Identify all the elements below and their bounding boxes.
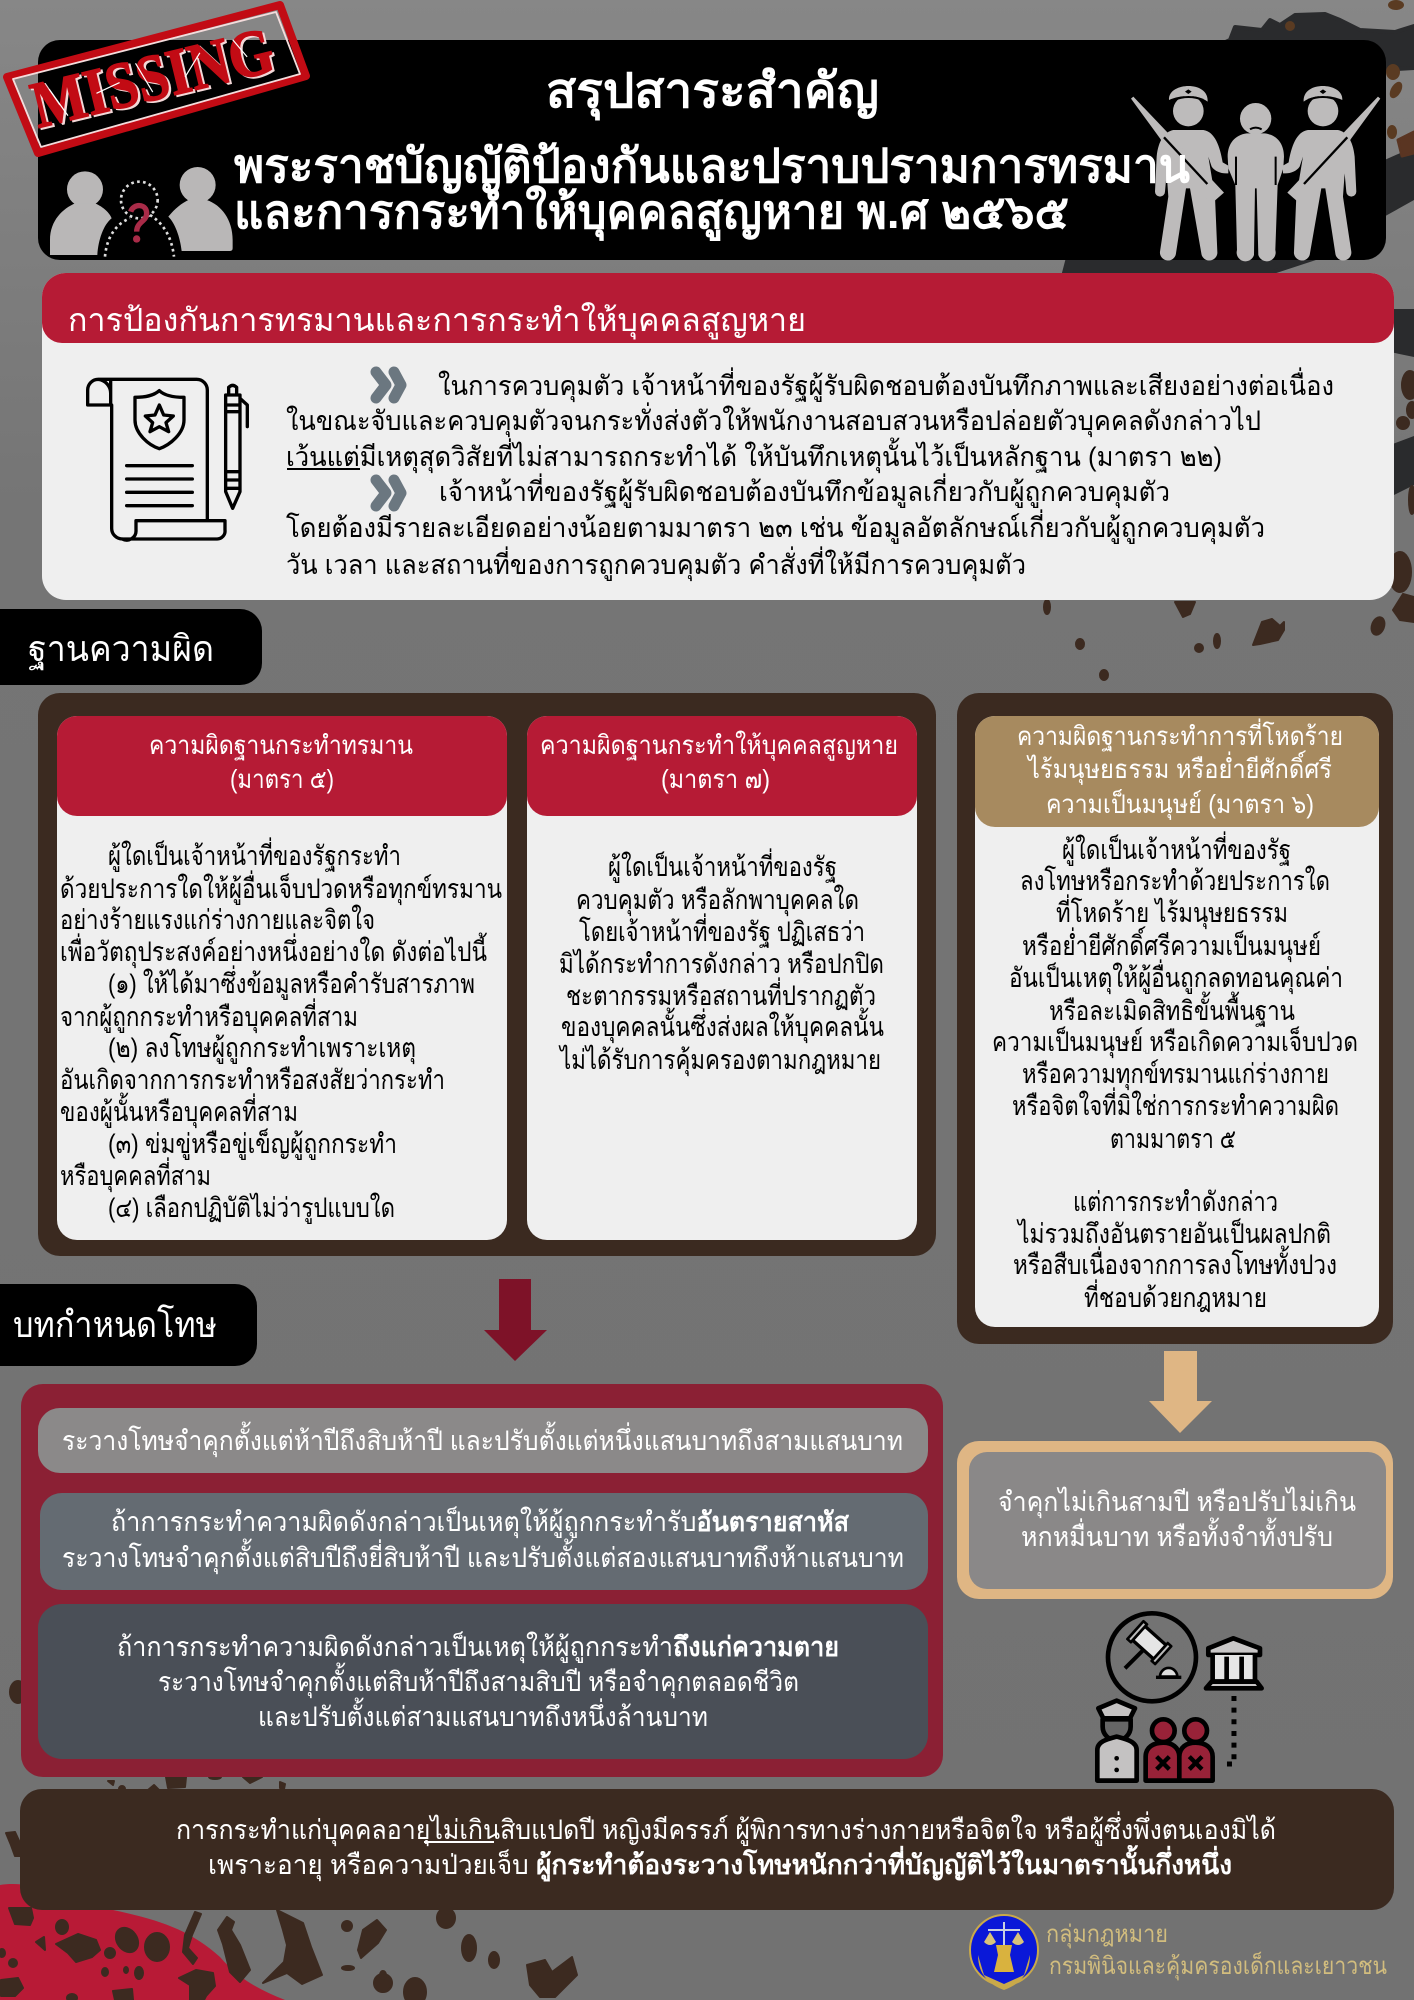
header band — [38, 40, 1386, 261]
card: torture offence: ผู้ใดเป็นเจ้าหน้าที่ของรัฐกระทำ — [108, 837, 401, 872]
card: torture offence: ด้วยประการใดให้ผู้อื่นเจ็บปวดหรือทุกข์ทรมาน — [60, 870, 502, 906]
panel: cruel treatment offence: ตามมาตรา ๕ — [1110, 1124, 1236, 1154]
credit text — [1046, 1921, 1387, 1981]
panel: cruel treatment offence: หรือย่ำยีศักดิ์ศรีความเป็นมนุษย์ — [1022, 926, 1321, 963]
section tab: penalties — [0, 1284, 257, 1366]
panel: penalties — [21, 1384, 943, 1777]
penalty: death: และปรับตั้งแต่สามแสนบาทถึงหนึ่งล้านบาท — [258, 1697, 708, 1732]
card: torture offence: (มาตรา ๕) — [230, 764, 334, 794]
card: torture offence: จากผู้ถูกกระทำหรือบุคคลที่สาม — [60, 998, 358, 1034]
card: enforced disappearance offence: ความผิดฐานกระทำให้บุคคลสูญหาย — [540, 730, 898, 761]
panel: cruel treatment offence: ผู้ใดเป็นเจ้าหน้าที่ของรัฐ — [1062, 831, 1291, 866]
title: สรุปสาระสำคัญ — [546, 65, 879, 121]
panel: cruel treatment offence — [957, 693, 1393, 1344]
panel: cruel treatment offence: อันเป็นเหตุให้ผู้อื่นถูกลดทอนคุณค่า — [1009, 959, 1343, 995]
card: enforced disappearance offence: ผู้ใดเป็นเจ้าหน้าที่ของรัฐ — [608, 848, 837, 883]
panel heading band — [42, 273, 1394, 343]
panel: offences group — [38, 693, 936, 1256]
arrow: tan down — [1149, 1351, 1212, 1433]
text block: recording duty: ในขณะจับและควบคุมตัวจนกระทั่งส่งตัวให้พนักงานสอบสวนหรือปล่อยตัวบุคคลดังกล่าวไป — [286, 402, 1261, 438]
text block: detainee data: เจ้าหน้าที่ของรัฐผู้รับผิดชอบต้องบันทึกข้อมูลเกี่ยวกับผู้ถูกควบคุมตัว — [439, 473, 1170, 509]
text block: recording duty: เว้นแต่มีเหตุสุดวิสัยที่ไม่สามารถกระทำได้ ให้บันทึกเหตุนั้นไว้เป็นหลักฐาน (มาตรา ๒๒) — [286, 437, 1222, 474]
penalty: serious harm: ถ้าการกระทำความผิดดังกล่าวเป็นเหตุให้ผู้ถูกกระทำรับอันตรายสาหัส — [111, 1504, 849, 1539]
card: enforced disappearance offence: ของบุคคลนั้นซึ่งส่งผลให้บุคคลนั้น — [561, 1007, 884, 1044]
subtitle: พระราชบัญญัติป้องกันและปราบปรามการทรมาน — [234, 139, 1190, 194]
panel: cruel treatment offence: ไม่รวมถึงอันตรายอันเป็นผลปกติ — [1016, 1216, 1331, 1249]
penalty: death: ถ้าการกระทำความผิดดังกล่าวเป็นเหตุให้ผู้ถูกกระทำถึงแก่ความตาย — [117, 1629, 839, 1664]
panel: cruel treatment offence: หรือความทุกข์ทรมานแก่ร่างกาย — [1022, 1058, 1329, 1091]
panel: cruel treatment offence: หรือละเมิดสิทธิขั้นพื้นฐาน — [1049, 991, 1295, 1027]
panel: cruel treatment offence: หรือจิตใจที่มิใช่การกระทำความผิด — [1012, 1087, 1339, 1121]
card: enforced disappearance offence: มิได้กระทำการดังกล่าว หรือปกปิด — [559, 949, 884, 979]
card: enforced disappearance offence: ไม่ได้รับการคุ้มครองตามกฎหมาย — [558, 1045, 881, 1077]
panel: cruel treatment offence: ที่โหดร้าย ไร้มนุษยธรรม — [1056, 894, 1288, 930]
panel: cruel treatment offence: ความเป็นมนุษย์ (มาตรา ๖) — [1046, 788, 1314, 820]
card: torture offence — [57, 716, 507, 1240]
card: torture offence: เพื่อวัตถุประสงค์อย่างหนึ่งอย่างใด ดังต่อไปนี้ — [60, 932, 487, 969]
section tab: penalties: บทกำหนดโทษ — [13, 1304, 217, 1345]
card: enforced disappearance offence: โดยเจ้าหน้าที่ของรัฐ ปฏิเสธว่า — [579, 913, 865, 948]
panel: cruel treatment offence: แต่การกระทำดังกล่าว — [1073, 1187, 1278, 1217]
card: enforced disappearance offence: (มาตรา ๗) — [661, 764, 770, 794]
panel: cruel treatment offence: ความผิดฐานกระทำการที่โหดร้าย — [1017, 718, 1343, 752]
penalty: death: ระวางโทษจำคุกตั้งแต่สิบห้าปีถึงสามสิบปี หรือจำคุกตลอดชีวิต — [158, 1662, 799, 1699]
penalty: serious harm — [40, 1493, 928, 1590]
card: enforced disappearance offence: ชะตากรรมหรือสถานที่ปรากฏตัว — [566, 977, 876, 1011]
card: torture offence: (๑) ให้ได้มาซึ่งข้อมูลหรือคำรับสารภาพ — [108, 965, 475, 1000]
card: torture offence: (๓) ข่มขู่หรือขู่เข็ญผู้ถูกกระทำ — [108, 1126, 397, 1160]
text block: detainee data — [286, 473, 1265, 582]
panel heading: การป้องกันการทรมานและการกระทำให้บุคคลสูญหาย — [68, 302, 806, 340]
arrow: red down — [484, 1279, 547, 1361]
panel: cruel treatment offence: ลงโทษหรือกระทำด้วยประการใด — [1020, 865, 1330, 896]
card: enforced disappearance offence — [527, 716, 917, 1240]
panel: cruel treatment offence: หรือสืบเนื่องจากการลงโทษทั้งปวง — [1013, 1245, 1337, 1280]
callout: aggravated penalty: การกระทำแก่บุคคลอายุไม่เกินสิบแปดปี หญิงมีครรภ์ ผู้พิการทางร่างกายหรือจิตใจ หรือผู้ซึ่งพึ่งตนเองมิได้ — [176, 1811, 1276, 1847]
panel: prevention — [42, 273, 1394, 600]
card: torture offence: (๒) ลงโทษผู้ถูกกระทำเพราะเหตุ — [108, 1033, 416, 1065]
icon: soldiers with detainee — [1131, 86, 1380, 261]
stamp: missing: MISSING — [27, 15, 283, 144]
box: cruel treatment penalty — [957, 1441, 1393, 1599]
card: torture offence: อย่างร้ายแรงแก่ร่างกายและจิตใจ — [60, 904, 375, 935]
panel: cruel treatment offence: ที่ชอบด้วยกฎหมาย — [1084, 1279, 1267, 1313]
text block: detainee data: โดยต้องมีรายละเอียดอย่างน้อยตามมาตรา ๒๓ เช่น ข้อมูลอัตลักษณ์เกี่ยวกับผู้ถูกควบคุมตัว — [286, 509, 1265, 545]
logo: department emblem — [970, 1915, 1038, 1990]
subtitle — [234, 139, 1190, 242]
penalty: serious harm: ระวางโทษจำคุกตั้งแต่สิบปีถึงยี่สิบห้าปี และปรับตั้งแต่สองแสนบาทถึงห้าแสนบาท — [62, 1538, 904, 1575]
icon: missing people — [50, 167, 233, 257]
penalty: base — [38, 1408, 928, 1473]
icon: justice officer and prisoners — [1097, 1613, 1262, 1781]
section tab: offences: ฐานความผิด — [28, 628, 214, 671]
icon: chevrons — [376, 372, 401, 398]
penalty: death — [38, 1604, 928, 1759]
card: torture offence: หรือบุคคลที่สาม — [60, 1157, 211, 1193]
text block: detainee data: วัน เวลา และสถานที่ของการถูกควบคุมตัว คำสั่งที่ให้มีการควบคุมตัว — [286, 546, 1026, 582]
text block: recording duty — [286, 367, 1334, 474]
box: cruel treatment penalty: จำคุกไม่เกินสามปี หรือปรับไม่เกิน — [998, 1487, 1356, 1519]
text block: recording duty: ในการควบคุมตัว เจ้าหน้าที่ของรัฐผู้รับผิดชอบต้องบันทึกภาพและเสียงอย่างต่อเนื่อง — [438, 367, 1334, 403]
callout: aggravated penalty: เพราะอายุ หรือความป่วยเจ็บ ผู้กระทำต้องระวางโทษหนักกว่าที่บัญญัติไว้ในมาตรานั้นกึ่งหนึ่ง — [208, 1844, 1232, 1882]
section tab: offences — [0, 609, 262, 685]
box: cruel treatment penalty: หกหมื่นบาท หรือทั้งจำทั้งปรับ — [1021, 1517, 1333, 1552]
credit text: กลุ่มกฎหมาย — [1046, 1921, 1168, 1949]
card: torture offence: ความผิดฐานกระทำทรมาน — [149, 730, 413, 761]
stamp: missing: MISSING — [24, 14, 281, 143]
icon: scroll with shield and pen — [88, 379, 247, 540]
card: enforced disappearance offence: ควบคุมตัว หรือลักพาบุคคลใด — [576, 884, 859, 917]
card: torture offence: ของผู้นั้นหรือบุคคลที่สาม — [60, 1092, 298, 1129]
subtitle: และการกระทำให้บุคคลสูญหาย พ.ศ ๒๕๖๕ — [234, 184, 1069, 242]
card: torture offence: อันเกิดจากการกระทำหรือสงสัยว่ากระทำ — [60, 1065, 445, 1095]
card: torture offence: (๔) เลือกปฏิบัติไม่ว่ารูปแบบใด — [108, 1192, 395, 1224]
callout: aggravated penalty — [20, 1789, 1394, 1910]
panel: cruel treatment offence: ไร้มนุษยธรรม หรือย่ำยีศักดิ์ศรี — [1026, 750, 1332, 785]
icon: chevrons second — [376, 480, 401, 506]
penalty: base: ระวางโทษจำคุกตั้งแต่ห้าปีถึงสิบห้าปี และปรับตั้งแต่หนึ่งแสนบาทถึงสามแสนบาท — [62, 1421, 903, 1458]
